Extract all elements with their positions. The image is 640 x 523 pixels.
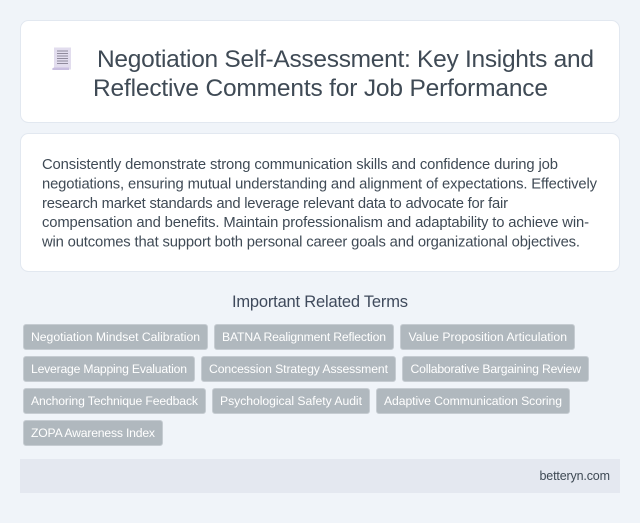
footer [20, 459, 620, 493]
tag: Adaptive Communication Scoring [384, 394, 562, 408]
panel: summary paragraph [20, 134, 620, 272]
tag [212, 388, 370, 414]
tag [400, 324, 574, 350]
tag: BATNA Realignment Reflection [222, 330, 386, 344]
tag [376, 388, 570, 414]
tag group: related terms [24, 324, 588, 446]
tag: Concession Strategy Assessment [209, 362, 389, 376]
footer credit: betteryn.com [540, 469, 610, 483]
tag [24, 356, 194, 382]
tag [202, 356, 396, 382]
title: Reflective Comments for Job Performance [93, 75, 548, 102]
tag [24, 420, 162, 446]
title: Negotiation Self-Assessment: Key Insights and [97, 46, 594, 73]
icon: document [52, 48, 71, 70]
summary text [41, 157, 598, 250]
tag [214, 324, 394, 350]
tag: Anchoring Technique Feedback [31, 394, 199, 408]
tag: Collaborative Bargaining Review [410, 362, 581, 376]
tag [24, 388, 206, 414]
tag: Leverage Mapping Evaluation [31, 362, 187, 376]
title [93, 46, 594, 102]
summary text: compensation and benefits. Maintain professionalism and adaptability to achieve win- [42, 215, 589, 231]
tag: ZOPA Awareness Index [31, 426, 155, 440]
summary text: research market standards and leverage relevant data to advocate for fair [42, 196, 508, 212]
summary text: negotiations, ensuring mutual understanding and alignment of expectations. Effectively [42, 176, 598, 192]
tag: Psychological Safety Audit [220, 394, 363, 408]
summary text: Consistently demonstrate strong communication skills and confidence during job [42, 157, 558, 173]
summary text: win outcomes that support both personal career goals and organizational objectives. [41, 234, 580, 250]
heading: important related terms: Important Related Terms [232, 293, 408, 311]
tag [402, 356, 588, 382]
tag: Value Proposition Articulation [408, 330, 567, 344]
panel: title card [20, 20, 620, 122]
tag: Negotiation Mindset Calibration [31, 330, 200, 344]
tag [24, 324, 208, 350]
